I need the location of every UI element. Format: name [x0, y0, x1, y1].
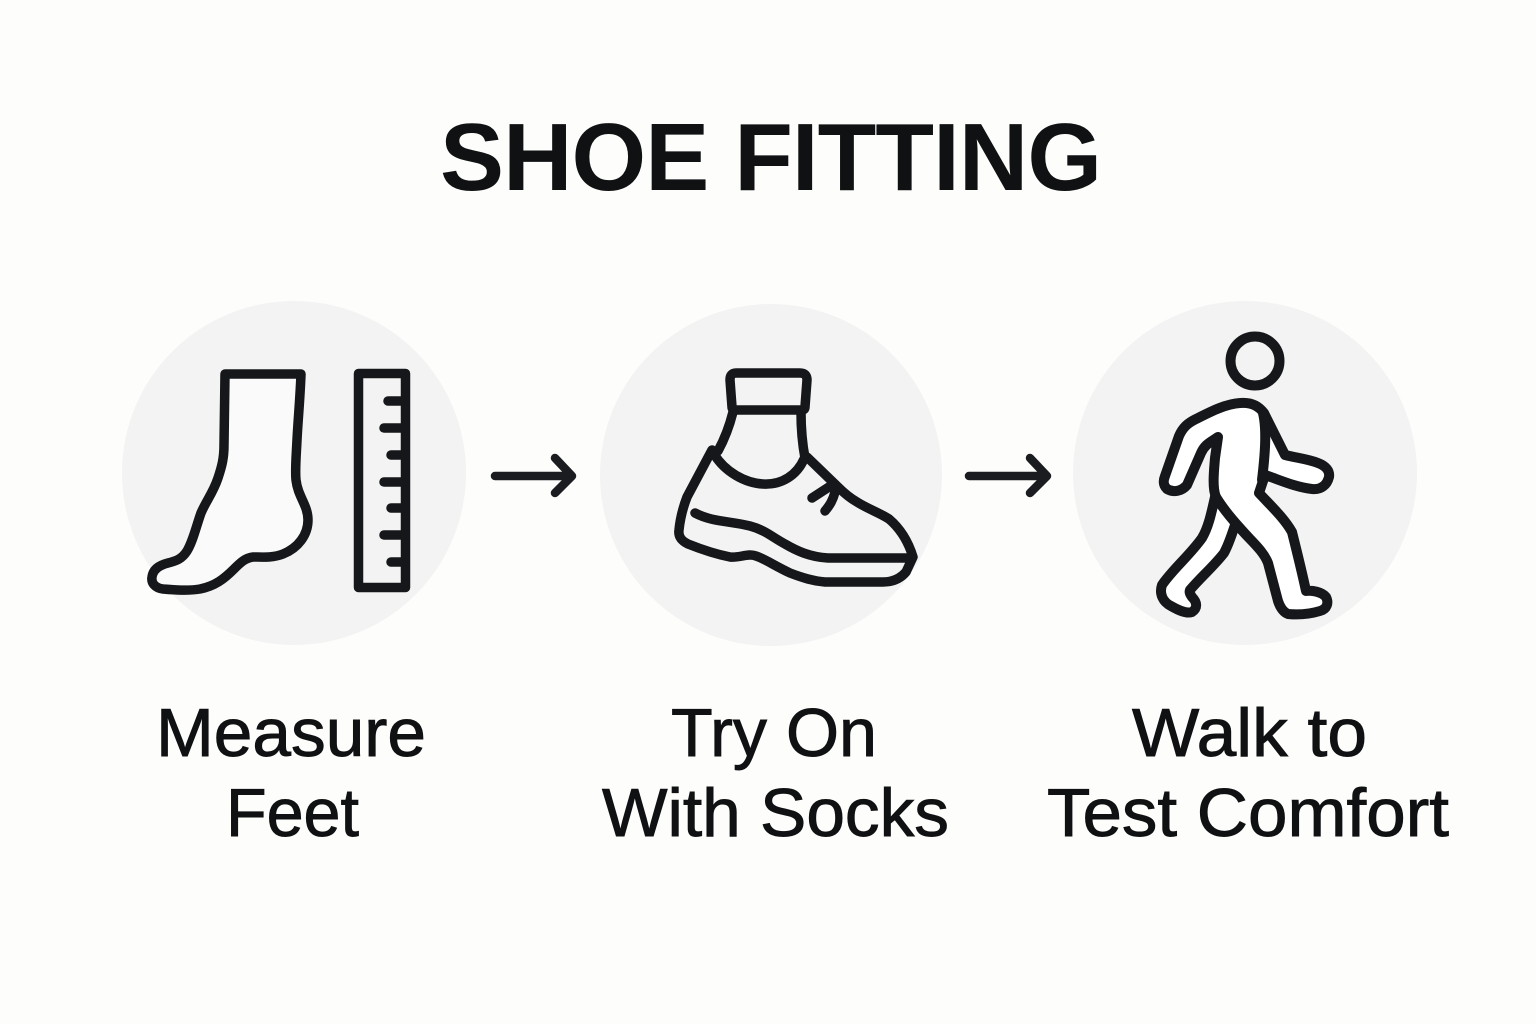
label: try on with socks: With Socks — [602, 775, 949, 851]
label: walk to test comfort: Test Comfort — [1047, 775, 1449, 851]
label: measure feet: Measure — [156, 695, 426, 771]
panel: step 2 try on with socks — [600, 304, 949, 851]
icon: sock and shoe — [679, 373, 913, 582]
label: measure feet — [156, 695, 426, 851]
label: try on with socks: Try On — [671, 695, 877, 771]
label: try on with socks — [602, 695, 949, 851]
icon: ruler — [358, 374, 406, 588]
label: walk to test comfort — [1047, 695, 1449, 851]
arrow: step 2 to step 3 — [969, 458, 1047, 493]
title: SHOE FITTING — [440, 104, 1102, 211]
label: measure feet: Feet — [226, 775, 359, 851]
circle background: step 3 — [1073, 301, 1417, 645]
panel: step 1 measure feet — [122, 301, 466, 851]
label: walk to test comfort: Walk to — [1132, 695, 1367, 771]
icon: foot — [152, 374, 308, 590]
circle background: step 2 — [600, 304, 942, 646]
panel: step 3 walk to test comfort — [1047, 301, 1449, 851]
arrow: step 1 to step 2 — [495, 458, 572, 493]
icon: walking person — [1161, 336, 1329, 614]
circle background: step 1 — [122, 301, 466, 645]
